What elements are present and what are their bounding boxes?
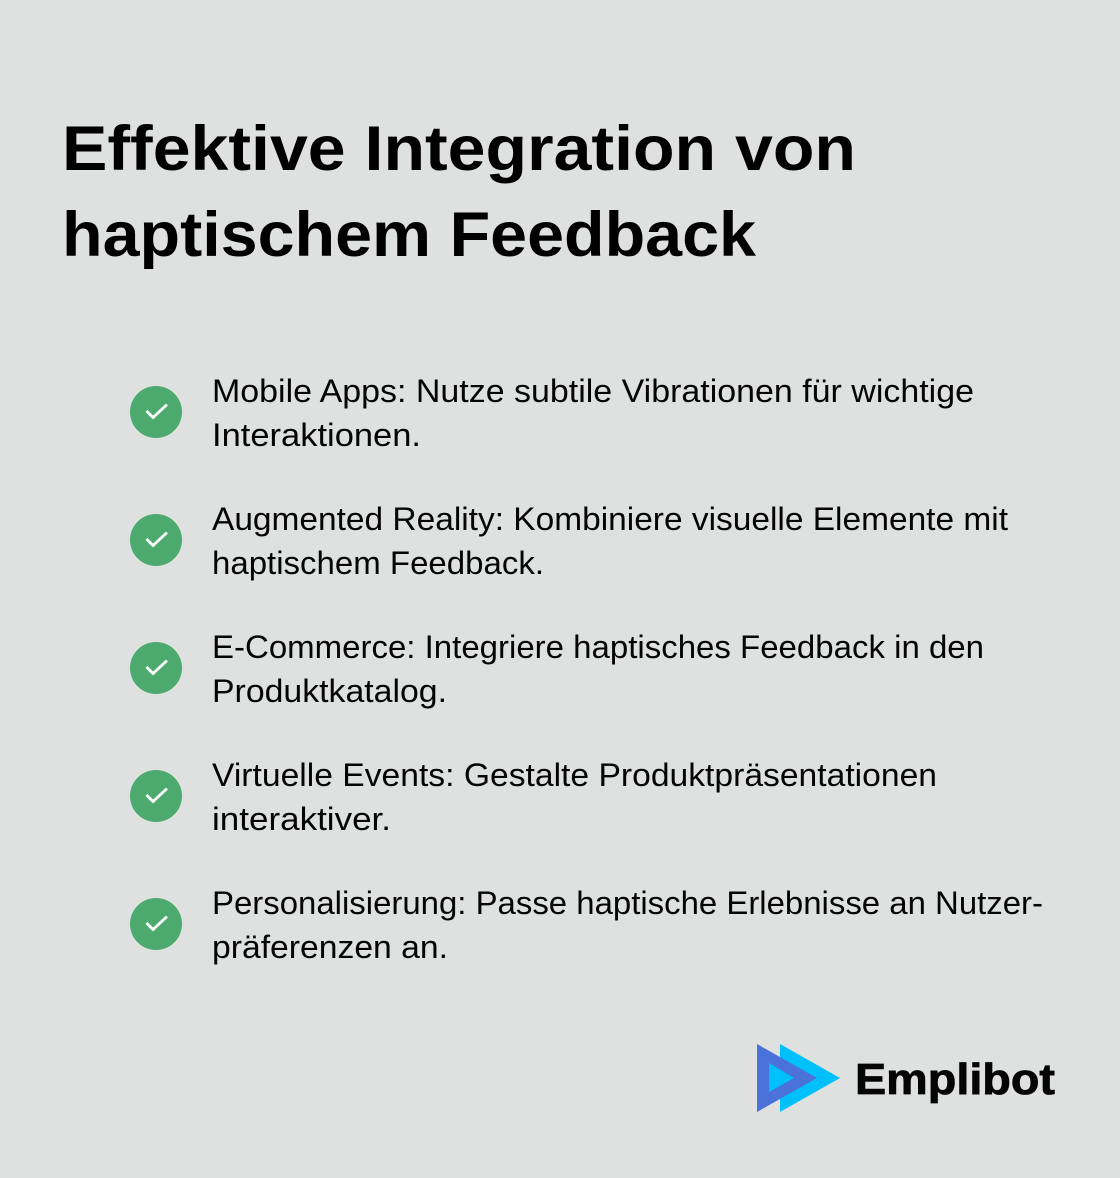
icon: play triangles <box>757 1044 840 1112</box>
title <box>62 114 856 270</box>
checklist <box>130 373 1043 965</box>
item: personalisierung <box>130 885 1043 965</box>
title: Effektive Integration von <box>62 114 856 184</box>
item: virtuelle events: interaktiver. <box>212 801 391 837</box>
item: mobile apps: Interaktionen. <box>212 417 421 453</box>
wordmark: Emplibot <box>855 1055 1055 1104</box>
item: virtuelle events <box>130 757 937 837</box>
logo: Emplibot <box>757 1044 1055 1112</box>
item: augmented reality: haptischem Feedback. <box>212 545 544 581</box>
item: mobile apps <box>130 373 974 453</box>
item: virtuelle events: Virtuelle Events: Gestalte Produktpräsentationen <box>212 757 937 793</box>
title: haptischem Feedback <box>62 200 757 270</box>
item: personalisierung: Personalisierung: Passe haptische Erlebnisse an Nutzer- <box>212 885 1043 921</box>
item: mobile apps: Mobile Apps: Nutze subtile Vibrationen für wichtige <box>212 373 974 409</box>
item: e-commerce: Produktkatalog. <box>212 673 447 709</box>
item: e-commerce <box>130 629 984 709</box>
item: augmented reality <box>130 501 1008 581</box>
item: personalisierung: präferenzen an. <box>212 929 448 965</box>
item: e-commerce: E-Commerce: Integriere haptisches Feedback in den <box>212 629 984 665</box>
item: augmented reality: Augmented Reality: Kombiniere visuelle Elemente mit <box>212 501 1008 537</box>
